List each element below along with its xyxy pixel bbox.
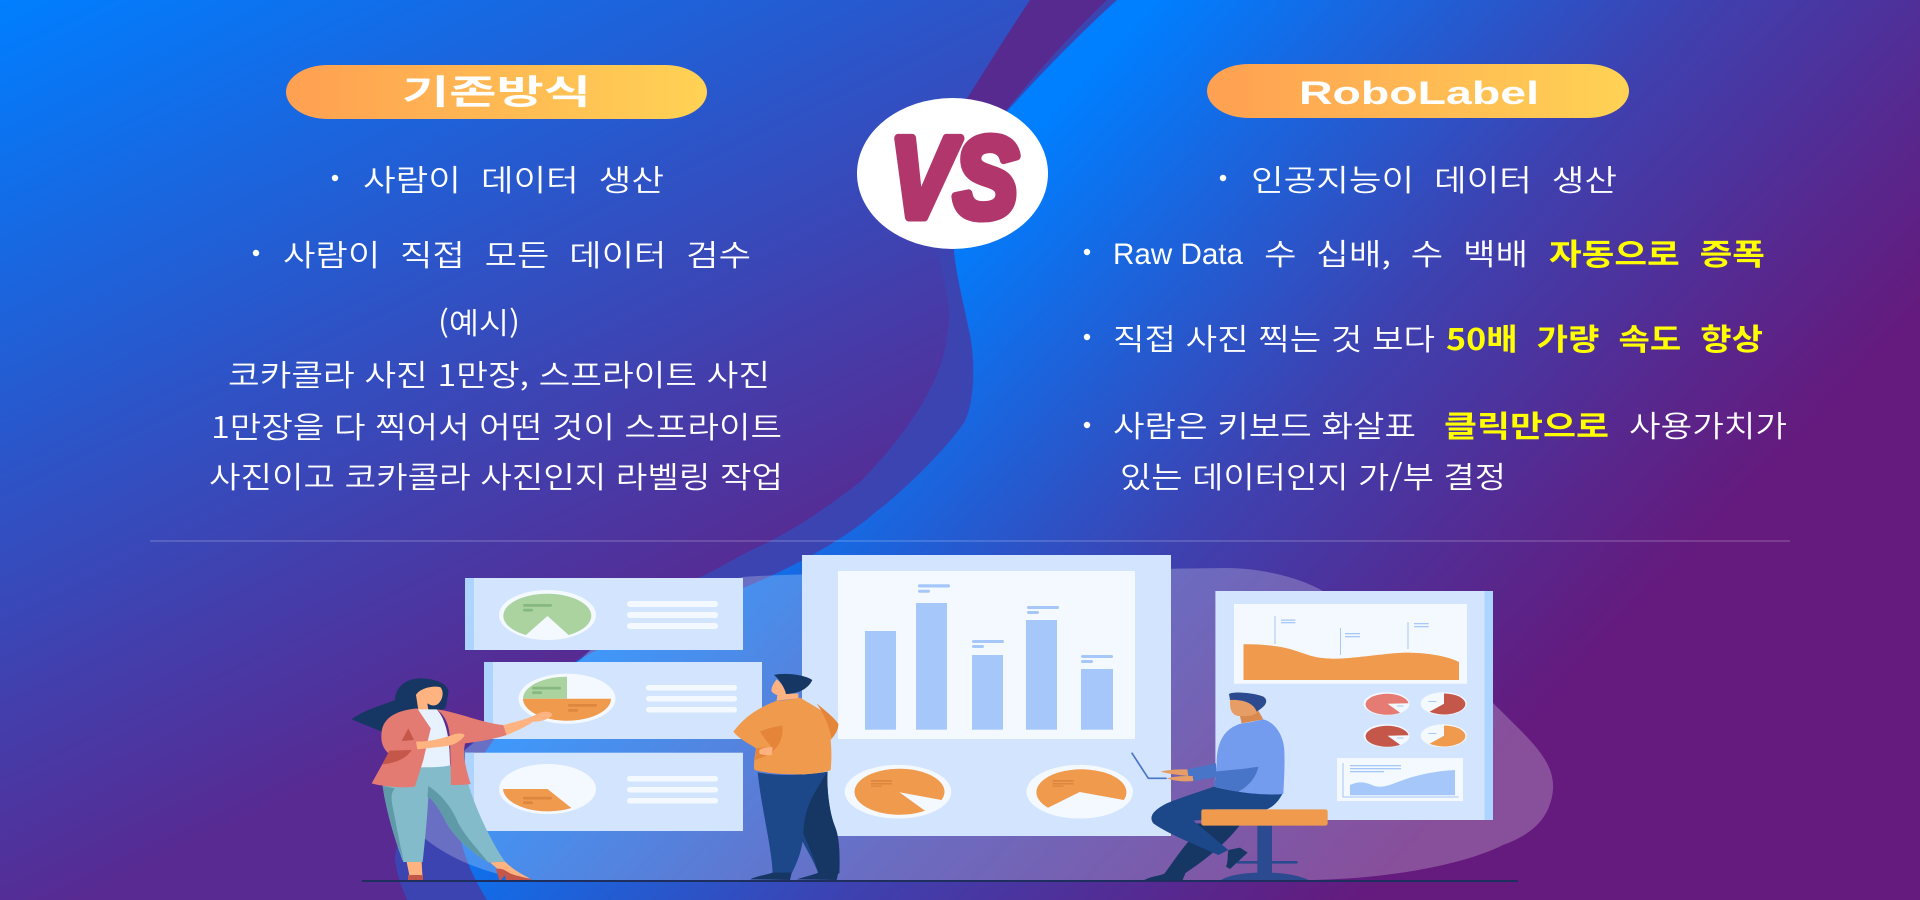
small pie charts	[1364, 692, 1467, 747]
bullet: keyboard click decision: 클릭만으로	[1444, 402, 1609, 446]
bullet: human data production: 사람이 데이터 생산	[363, 156, 664, 200]
panel: RoboLabel	[1084, 64, 1787, 497]
right board with area charts	[1215, 591, 1493, 820]
panel card 3: orange pie	[465, 753, 743, 831]
heading pill: RoboLabel	[1207, 64, 1629, 118]
orange area chart	[1244, 616, 1459, 680]
panel: existing method	[209, 65, 783, 497]
bullet: automatic raw data augmentation: 수 십배, 수 백배	[1264, 230, 1528, 274]
woman presenter	[352, 678, 552, 880]
heading pill: 기존방식: 기존방식	[402, 65, 591, 114]
pie chart left	[845, 765, 951, 818]
pie chart right	[1026, 765, 1133, 818]
bullet: AI data production: 인공지능이 데이터 생산	[1251, 156, 1617, 200]
heading pill: 기존방식	[286, 65, 707, 119]
bullet: keyboard click decision	[1084, 402, 1787, 497]
bullet: human review of all data: 사람이 직접 모든 데이터 검수	[283, 231, 751, 275]
bullet: fifty times faster than photographing: 직접 사진 찍는 것 보다	[1113, 315, 1435, 359]
panel card 2: mixed pie	[484, 662, 762, 739]
example text block: 1만장을 다 찍어서 어떤 것이 스프라이트	[211, 403, 782, 447]
VS badge	[857, 98, 1048, 249]
bullet: automatic raw data augmentation: 자동으로 증폭	[1549, 230, 1765, 274]
illustration: analytics team	[352, 555, 1518, 882]
bullet: automatic raw data augmentation	[1084, 230, 1765, 274]
bullet: keyboard click decision: 사용가치가	[1629, 402, 1787, 446]
panel card 1: green pie	[465, 578, 743, 650]
man sitting with laptop	[1132, 692, 1328, 880]
heading pill: RoboLabel: RoboLabel	[1299, 75, 1539, 111]
bar chart	[865, 584, 1113, 730]
main board with bar chart	[802, 555, 1171, 836]
bullet: automatic raw data augmentation: Raw Data	[1113, 238, 1243, 271]
VS badge: VS	[890, 115, 1018, 242]
example text block: 코카콜라 사진 1만장, 스프라이트 사진	[228, 351, 770, 395]
man standing	[733, 674, 840, 880]
example text block: (예시)	[438, 299, 520, 343]
example text block: 사진이고 코카콜라 사진인지 라벨링 작업	[209, 453, 783, 497]
blue area chart	[1337, 758, 1463, 801]
example text block	[209, 299, 783, 497]
bullet: fifty times faster than photographing: 50배 가량 속도 향상	[1446, 315, 1763, 359]
bullet: keyboard click decision: 사람은 키보드 화살표	[1113, 402, 1416, 446]
bullet: keyboard click decision: 있는 데이터인지 가/부 결정	[1120, 453, 1506, 497]
bullet: fifty times faster than photographing	[1084, 315, 1763, 359]
